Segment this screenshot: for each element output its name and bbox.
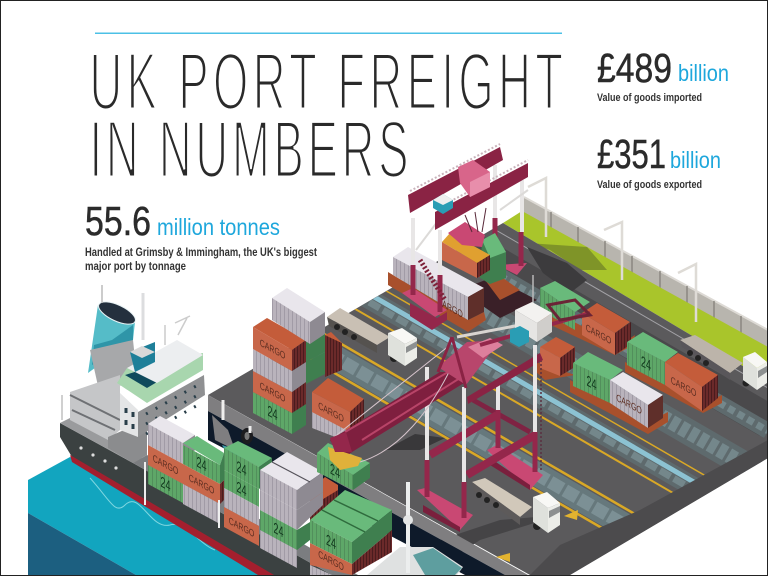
- red container: [253, 371, 306, 413]
- top white container: [272, 288, 325, 344]
- wall: [524, 197, 768, 349]
- stat: exports: billion: [670, 147, 721, 173]
- containers on ship: CARGO: [318, 548, 344, 573]
- title: IN NUMBERS: [90, 104, 412, 194]
- white container: [253, 349, 306, 392]
- street lamps: [528, 178, 696, 322]
- front train: green and white containers: CARGO: [616, 392, 642, 417]
- front train: green and white containers: 24: [586, 371, 597, 394]
- machine house: [438, 337, 503, 388]
- second quay stack: CARGO: [318, 400, 344, 425]
- red container: CARGO: [260, 380, 285, 405]
- title: [90, 36, 567, 194]
- tyre fender: [241, 426, 253, 444]
- quay edge and water gap: [208, 395, 528, 575]
- stat: imports: billion: [678, 60, 729, 86]
- rear crane far legs and shadow: [460, 165, 537, 318]
- middle train: green and red containers: 24: [641, 352, 651, 375]
- crane cab: [510, 302, 552, 347]
- stat: exports: £351: [597, 131, 666, 177]
- column 4: [310, 477, 338, 524]
- middle train: green and red containers: CARGO: [671, 374, 696, 399]
- column 2: 24: [196, 452, 207, 475]
- containers on ship: CARGO: [153, 452, 178, 477]
- column 3: [224, 441, 272, 489]
- containers on ship: [145, 416, 392, 575]
- stat: imports: [597, 45, 729, 104]
- ship bow: [367, 482, 463, 575]
- ship hull: [60, 418, 358, 575]
- column 5: 24: [326, 530, 336, 553]
- container stack on quay: [253, 288, 342, 434]
- rail tracks: [300, 230, 767, 528]
- lifted green container: [317, 443, 370, 490]
- column 5: [310, 490, 392, 564]
- green verge: [503, 211, 768, 381]
- rear gantry crane: [402, 144, 528, 330]
- lifted green container: 24: [330, 459, 340, 482]
- lifted red container: [442, 233, 520, 300]
- stat: tonnage: 55.6: [85, 198, 151, 244]
- stat: tonnage: Handled at Grimsby & Immingham, the UK's biggest: [85, 245, 317, 259]
- containers on ship: 24: [273, 518, 284, 541]
- ship superstructure: [62, 293, 205, 463]
- title: UK PORT FREIGHT: [90, 36, 567, 126]
- stat: tonnage: major port by tonnage: [85, 259, 186, 273]
- quay ground: [208, 223, 767, 575]
- column 3: 24: [236, 457, 247, 480]
- wagon and white cargo container: [388, 247, 486, 332]
- upper red container: [253, 318, 306, 371]
- stat: tonnage: [85, 198, 317, 273]
- stat: imports: £489: [597, 45, 672, 91]
- back train: green and red cargo containers: [536, 281, 635, 380]
- column 2: [183, 436, 224, 484]
- truck: top right: [680, 335, 767, 390]
- foreground gantry crane: [328, 275, 590, 532]
- containers on ship: 24: [160, 472, 171, 495]
- stat: imports: Value of goods imported: [597, 92, 702, 104]
- back train: green and red cargo containers: CARGO: [586, 322, 611, 347]
- containers on ship: 24: [236, 477, 247, 500]
- truck: rear left: [327, 308, 417, 366]
- containers on ship: CARGO: [229, 515, 254, 540]
- ship funnel: [88, 285, 139, 373]
- middle train: green and red containers: [625, 332, 722, 413]
- foreground truck: [472, 478, 560, 533]
- traffic cones: [496, 510, 578, 562]
- front train: green and white containers: [570, 352, 668, 434]
- upper red container: CARGO: [260, 337, 285, 362]
- sea: [28, 457, 273, 575]
- wagon and white cargo container: CARGO: [437, 295, 463, 320]
- bottom green container: [253, 392, 306, 434]
- crane boom: [328, 345, 464, 470]
- stat: exports: Value of goods exported: [597, 179, 702, 191]
- bottom green container: 24: [267, 401, 278, 424]
- gantry shadow on road: [527, 247, 587, 293]
- stat: tonnage: million tonnes: [157, 214, 280, 240]
- stat: exports: [597, 131, 721, 191]
- containers on ship: CARGO: [189, 472, 214, 497]
- header rule: [95, 32, 562, 34]
- second quay stack: [312, 378, 364, 440]
- column 1: [148, 416, 195, 464]
